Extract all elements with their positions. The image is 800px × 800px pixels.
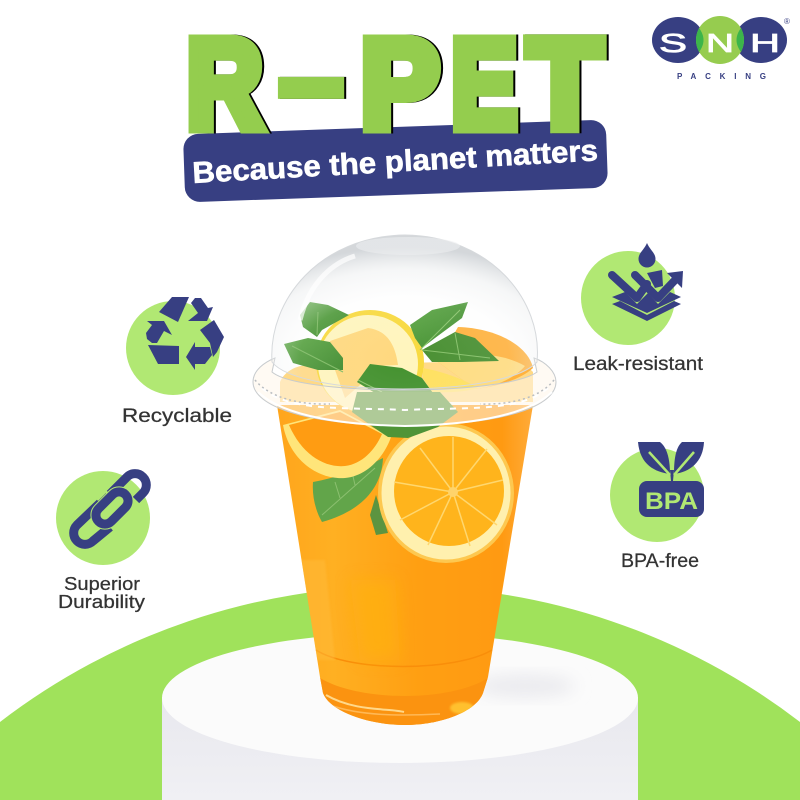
pedestal	[162, 633, 638, 800]
feature: Recyclable	[122, 297, 232, 427]
SNH Packing logo: PACKING	[677, 72, 766, 81]
icon: BPA leaf badge: BPA	[645, 488, 698, 515]
mint leaf through rim	[352, 392, 458, 438]
plastic cup with juice	[253, 235, 556, 730]
leaf in juice	[313, 458, 383, 522]
title R-PET: -	[276, 7, 347, 148]
right lemon slices under lid	[423, 327, 533, 392]
feature: Superior Durability	[56, 471, 150, 612]
SNH Packing logo: S	[659, 28, 687, 58]
icon: recycle	[146, 297, 224, 370]
feature: BPA-free: BPA-free	[621, 551, 699, 572]
feature: Leak-resistant: Leak-resistant	[573, 354, 704, 375]
dome lid	[272, 235, 537, 389]
feature: BPA-free	[610, 442, 704, 572]
green dome background	[0, 586, 800, 800]
cup base ridges	[300, 560, 492, 730]
small leaf in juice	[370, 495, 388, 535]
icon: chain links	[74, 474, 146, 544]
pale fruit base under lid	[280, 360, 533, 402]
SNH Packing logo: H	[750, 28, 780, 58]
mint leaf centre	[357, 364, 433, 393]
mint leaf right upper	[410, 302, 468, 350]
title R-PET: R	[186, 14, 263, 155]
mint leaf top left	[300, 302, 349, 337]
title R-PET: P	[360, 13, 440, 154]
title R-PET: T	[528, 15, 602, 155]
title R-PET	[186, 7, 602, 155]
mint leaf left	[284, 338, 343, 372]
upper lemon under lid	[316, 310, 424, 414]
lid rim	[253, 358, 556, 426]
large lemon slice	[378, 423, 514, 563]
half lemon slice	[283, 410, 391, 478]
banner	[183, 120, 608, 202]
SNH Packing logo	[652, 16, 790, 81]
title R-PET: E	[451, 14, 517, 155]
SNH Packing logo: N	[706, 28, 734, 58]
mint leaf right lower	[422, 332, 499, 362]
feature: Leak-resistant	[573, 243, 704, 375]
tagline: Because the planet matters	[192, 134, 599, 190]
icon: layers with drop	[612, 243, 683, 321]
feature: Superior Durability: Durability	[58, 592, 145, 612]
SNH Packing logo: ®	[784, 17, 790, 26]
feature: Superior Durability: Superior	[64, 574, 140, 594]
juice body	[277, 405, 533, 725]
feature: Recyclable: Recyclable	[122, 406, 232, 427]
